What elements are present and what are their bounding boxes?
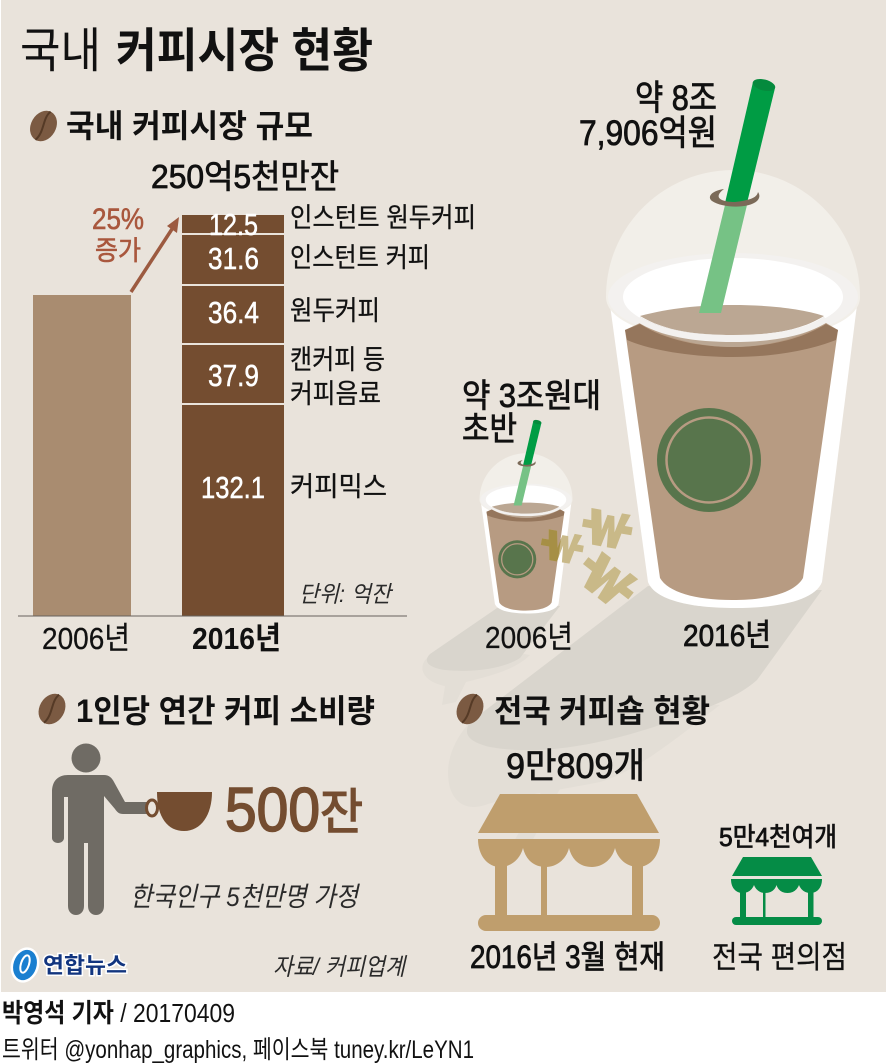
icon: coffee bean xyxy=(451,689,489,729)
note: population assumption: 한국인구 5천만명 가정 xyxy=(130,882,361,912)
value: 2006 sales: 초반 xyxy=(462,410,517,447)
cup label: 2016: 2016년 xyxy=(683,618,771,653)
total value: 250억5천만잔 xyxy=(151,158,339,195)
heading: consumption: 1인당 연간 커피 소비량 xyxy=(76,693,375,729)
axis label: 2006: 2006년 xyxy=(42,621,130,656)
value: 500 cups: 500 xyxy=(225,776,320,845)
logo: Yonhap News: 연합뉴스 xyxy=(43,953,127,978)
cup label: 2006: 2006년 xyxy=(485,620,573,655)
value: convenience stores: 5만4천여개 xyxy=(719,822,837,852)
icon: convenience store xyxy=(731,857,822,925)
illustration: small cup 2006 xyxy=(480,419,572,614)
stacked bar: 2016 xyxy=(182,215,284,616)
icon: coffee bean xyxy=(25,106,62,146)
title xyxy=(20,24,373,78)
title: 커피시장 현황 xyxy=(116,24,373,77)
bar: 2006 xyxy=(33,295,131,616)
icons: won symbols xyxy=(540,508,638,604)
icon: coffee shop store xyxy=(478,794,660,931)
source: 자료/ 커피업계 xyxy=(273,954,408,981)
growth label xyxy=(92,203,144,266)
label: date: 2016년 3월 현재 xyxy=(470,939,665,975)
bar values: 132.1 xyxy=(201,470,265,505)
bar values: 37.9 xyxy=(208,358,259,393)
value: 2016 sales xyxy=(579,79,717,153)
bar values: 12.5 xyxy=(209,207,258,242)
bar labels: 캔커피 등 xyxy=(290,345,385,375)
growth label: 25% xyxy=(92,203,144,236)
baseline xyxy=(18,615,407,617)
bar labels: 인스턴트 커피 xyxy=(290,243,430,273)
shadow: cups on the ground xyxy=(422,586,822,845)
byline: 박영석 기자 / 20170409 xyxy=(2,998,235,1028)
value: 2016 sales: 7,906억원 xyxy=(579,114,717,153)
bar labels xyxy=(290,203,476,502)
panel: market size chart xyxy=(18,106,476,656)
bar values: 31.6 xyxy=(208,241,259,276)
axis label: 2016: 2016년 xyxy=(192,621,281,656)
label: convenience stores: 전국 편의점 xyxy=(712,940,847,975)
bar labels: 원두커피 xyxy=(290,296,380,326)
unit note: 단위: 억잔 xyxy=(299,581,394,607)
panel: per-person consumption xyxy=(33,689,375,915)
value: 2006 sales xyxy=(462,377,601,447)
growth label: 증가 xyxy=(95,236,141,266)
bar labels: 인스턴트 원두커피 xyxy=(290,203,476,233)
panel: coffee shops xyxy=(451,689,847,975)
title: 국내 xyxy=(20,25,101,78)
icon: person xyxy=(52,744,148,915)
value: 500 cups: 잔 xyxy=(320,786,363,840)
value: 2016 sales: 약 8조 xyxy=(635,79,717,118)
heading: coffee shops: 전국 커피숍 현황 xyxy=(494,693,710,729)
value: 2006 sales: 약 3조원대 xyxy=(462,377,601,414)
bar values: 36.4 xyxy=(208,295,259,330)
icon: coffee bean xyxy=(33,689,71,729)
logo: Yonhap News xyxy=(6,944,127,986)
bar labels: 커피음료 xyxy=(290,379,381,409)
growth arrow xyxy=(131,217,179,292)
bar values xyxy=(201,207,265,505)
value: coffee shop count: 9만809개 xyxy=(506,747,645,786)
illustration: large cup 2016 xyxy=(606,77,860,608)
social credits: 트위터 @yonhap_graphics, 페이스북 tuney.kr/LeYN1 xyxy=(2,1036,474,1064)
bar labels: 커피믹스 xyxy=(290,472,387,502)
heading: market size: 국내 커피시장 규모 xyxy=(66,108,313,144)
icon: coffee cup xyxy=(146,792,212,831)
